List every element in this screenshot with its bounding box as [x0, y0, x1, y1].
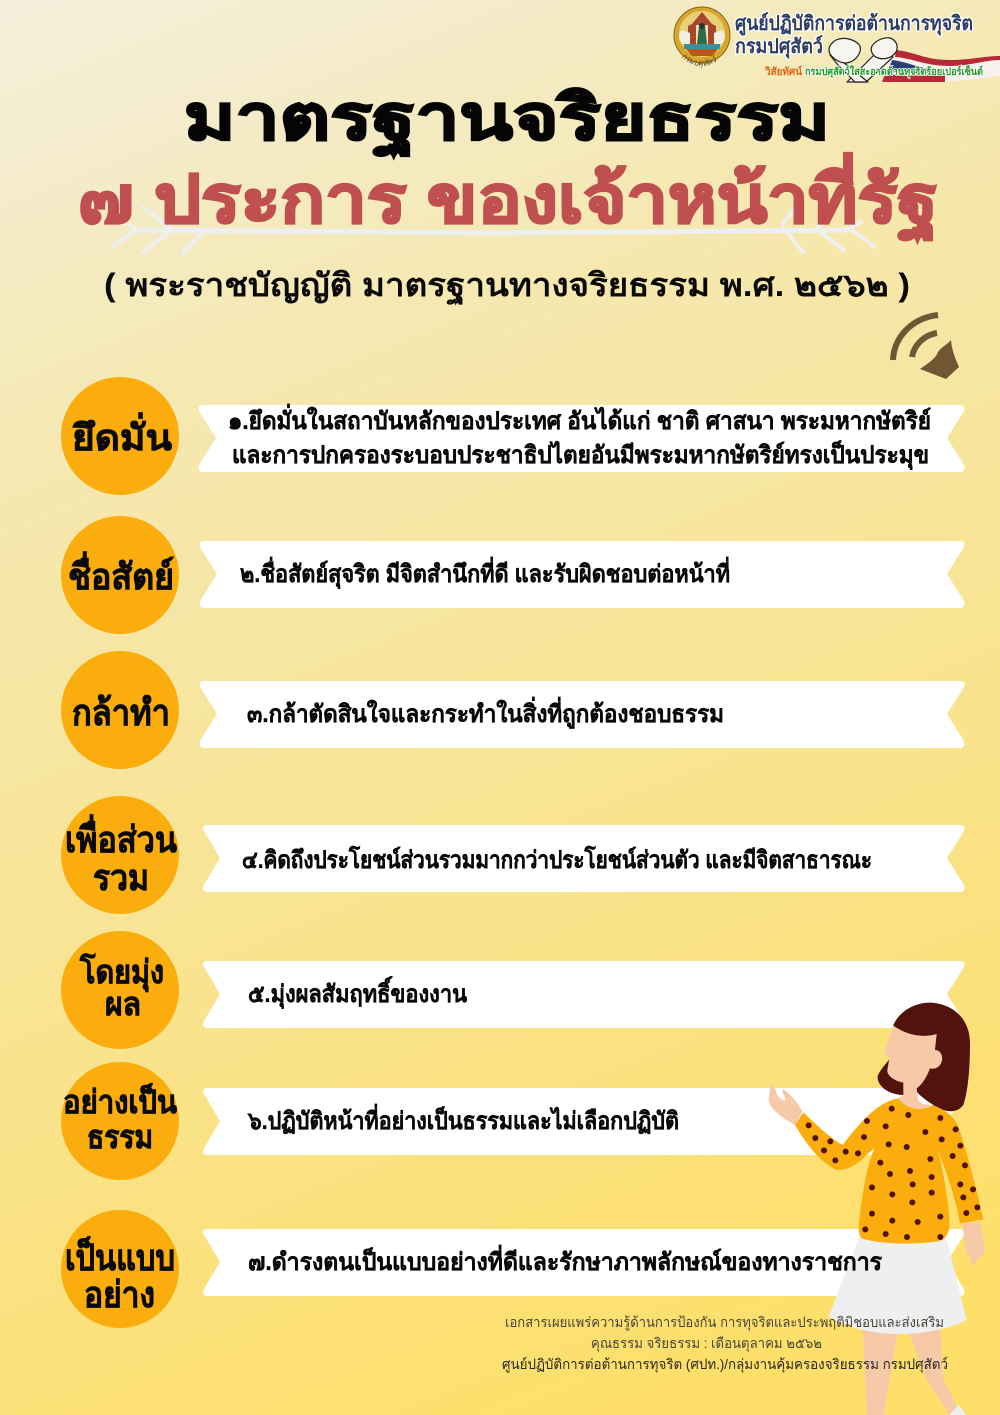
icon: speaker — [893, 315, 959, 379]
face and neck — [884, 1026, 942, 1109]
circle badge 6: ธรรม — [87, 1119, 153, 1155]
footer credit — [502, 1314, 948, 1373]
ribbon 3 text: ๓.กล้าตัดสินใจและกระทำในสิ่งที่ถูกต้องชอบธรรม — [247, 696, 724, 729]
footer credit: คุณธรรม จริยธรรม : เดือนตุลาคม ๒๕๖๒ — [591, 1335, 822, 1352]
panel: ribbon 1 — [199, 405, 964, 472]
panel: ribbon 4 — [203, 825, 964, 892]
logo heading: ศูนย์ปฏิบัติการต่อต้านการทุจริต — [735, 12, 973, 37]
circle badge 5: โดยมุ่ง — [79, 953, 164, 993]
circle badge 6 — [61, 1062, 179, 1180]
logo vision text — [764, 64, 983, 79]
circle badge 4: เพื่อส่วน — [65, 814, 177, 860]
icon: department seal: กรมปศุสัตว์ — [682, 54, 716, 68]
ribbon 1 text: ๑.ยึดมั่นในสถาบันหลักของประเทศ อันได้แก่ ชาติ ศาสนา พระมหากษัตริย์ — [228, 403, 931, 435]
panel: ribbon 6 — [203, 1088, 964, 1155]
circle badge 2: ชื่อสัตย์ — [68, 551, 174, 597]
ribbon 4 text: ๔.คิดถึงประโยชน์ส่วนรวมมากกว่าประโยชน์ส่วนตัว และมีจิตสาธารณะ — [242, 845, 872, 874]
circle badge 2 — [61, 516, 179, 634]
circle badge 5 — [61, 931, 179, 1049]
logo heading — [735, 12, 973, 59]
panel: ribbon 7 — [203, 1229, 964, 1296]
ribbon 1 text: และการปกครองระบอบประชาธิปไตยอันมีพระมหากษัตริย์ทรงเป็นประมุข — [232, 440, 929, 471]
circle badge 3: กล้าทำ — [72, 693, 170, 733]
panel: ribbon 2 — [200, 541, 964, 608]
logo heading: กรมปศุสัตว์ — [735, 35, 823, 59]
circle badge 6: อย่างเป็น — [63, 1082, 177, 1120]
circle badge 7: เป็นแบบ — [65, 1235, 175, 1278]
circle badge 3 — [61, 651, 179, 769]
icon: flag — [880, 50, 1000, 82]
circle badge 1: ยึดมั่น — [72, 412, 172, 458]
circle badge 7: อย่าง — [84, 1275, 155, 1315]
footer credit: เอกสารเผยแพร่ความรู้ด้านการป้องกัน การทุจริตและประพฤติมิชอบและส่งเสริม — [505, 1314, 944, 1331]
subtitle red: ๗ ประการ ของเจ้าหน้าที่รัฐ — [78, 152, 938, 242]
illustration: woman pointing — [769, 1003, 985, 1415]
title: มาตรฐานจริยธรรม — [184, 84, 830, 158]
footer credit: ศูนย์ปฏิบัติการต่อต้านการทุจริต (ศปท.)/กลุ่มงานคุ้มครองจริยธรรม กรมปศุสัตว์ — [502, 1356, 948, 1373]
ribbon 6 text: ๖.ปฏิบัติหน้าที่อย่างเป็นธรรมและไม่เลือกปฏิบัติ — [247, 1103, 679, 1135]
legs — [863, 1323, 957, 1415]
skirt — [829, 1237, 967, 1334]
circle badge 1 — [61, 377, 179, 495]
ribbon 5 text: ๕.มุ่งผลสัมฤทธิ์ของงาน — [248, 976, 468, 1010]
hair — [878, 1003, 970, 1111]
ribbon 1 text — [228, 403, 931, 471]
law reference line: ( พระราชบัญญัติ มาตรฐานทางจริยธรรม พ.ศ. ๒๕๖๒ ) — [104, 267, 910, 306]
hand — [769, 1084, 803, 1125]
circle badge 5: ผล — [105, 986, 141, 1022]
icon: arrow decoration — [112, 203, 875, 253]
shoe — [949, 1405, 967, 1415]
circle badge 7 — [61, 1210, 179, 1328]
ribbon 2 text: ๒.ชื่อสัตย์สุจริต มีจิตสำนึกที่ดี และรับผิดชอบต่อหน้าที่ — [240, 556, 730, 590]
ribbon 7 text: ๗.ดำรงตนเป็นแบบอย่างที่ดีและรักษาภาพลักษณ์ของทางราชการ — [248, 1244, 882, 1276]
logo header — [674, 6, 1000, 83]
panel: ribbon 5 — [203, 961, 964, 1028]
circle badge 4: รวม — [93, 858, 149, 898]
sweater dots — [806, 1106, 980, 1240]
icon: crossed fists — [829, 38, 897, 82]
panel: ribbon 3 — [200, 681, 964, 748]
circle badge 4 — [61, 796, 179, 914]
logo vision text: วิสัยทัศน์ — [764, 65, 803, 78]
icon: department seal — [674, 6, 730, 68]
right hand — [963, 1222, 985, 1267]
sweater — [795, 1098, 983, 1244]
